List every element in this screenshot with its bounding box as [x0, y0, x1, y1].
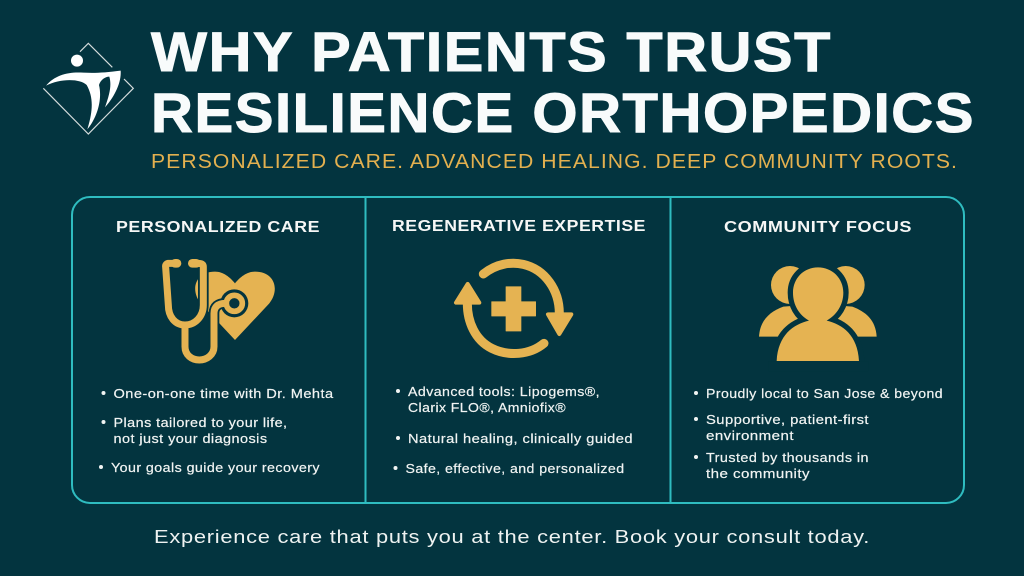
title: WHY PATIENTS TRUST	[151, 20, 832, 83]
icon: group of people	[759, 266, 877, 371]
icon: Resilience Orthopedics logo	[43, 43, 133, 134]
heading: regenerative expertise: REGENERATIVE EXPERTISE	[392, 218, 646, 235]
title	[151, 20, 975, 144]
bullet list: regenerative expertise: Advanced tools: Lipogems®,	[408, 384, 600, 399]
bullet list: regenerative expertise: Clarix FLO®, Amniofix®	[408, 400, 566, 415]
panel: regenerative expertise	[392, 218, 646, 476]
panel: three-column frame	[72, 197, 964, 503]
panel: personalized care	[99, 219, 334, 475]
bullet list: community focus: Supportive, patient-first	[706, 412, 869, 427]
title: RESILIENCE ORTHOPEDICS	[151, 81, 975, 144]
bullet list: personalized care	[99, 386, 334, 475]
bullet list: community focus: Trusted by thousands in	[706, 450, 869, 465]
bullet list: community focus: the community	[706, 466, 810, 481]
icon: stethoscope and heart	[165, 259, 275, 360]
bullet list: personalized care: Your goals guide your recovery	[111, 460, 320, 475]
bullet list: regenerative expertise: Natural healing, clinically guided	[408, 431, 633, 446]
bullet list: regenerative expertise	[394, 384, 633, 476]
heading: community focus: COMMUNITY FOCUS	[724, 219, 912, 236]
bullet list: personalized care: not just your diagnosis	[114, 431, 268, 446]
subtitle: PERSONALIZED CARE. ADVANCED HEALING. DEEP COMMUNITY ROOTS.	[151, 151, 958, 173]
panel: community focus	[694, 219, 943, 481]
footer call to action: Experience care that puts you at the center. Book your consult today.	[154, 527, 870, 547]
bullet list: personalized care: One-on-one time with Dr. Mehta	[114, 386, 334, 401]
bullet list: community focus: Proudly local to San Jose & beyond	[706, 386, 943, 401]
bullet list: community focus	[694, 386, 943, 481]
bullet list: community focus: environment	[706, 428, 794, 443]
bullet list: regenerative expertise: Safe, effective, and personalized	[406, 461, 624, 476]
bullet list: personalized care: Plans tailored to your life,	[114, 415, 288, 430]
icon: cycle arrows with medical cross	[456, 263, 571, 354]
heading: personalized care: PERSONALIZED CARE	[116, 219, 320, 236]
